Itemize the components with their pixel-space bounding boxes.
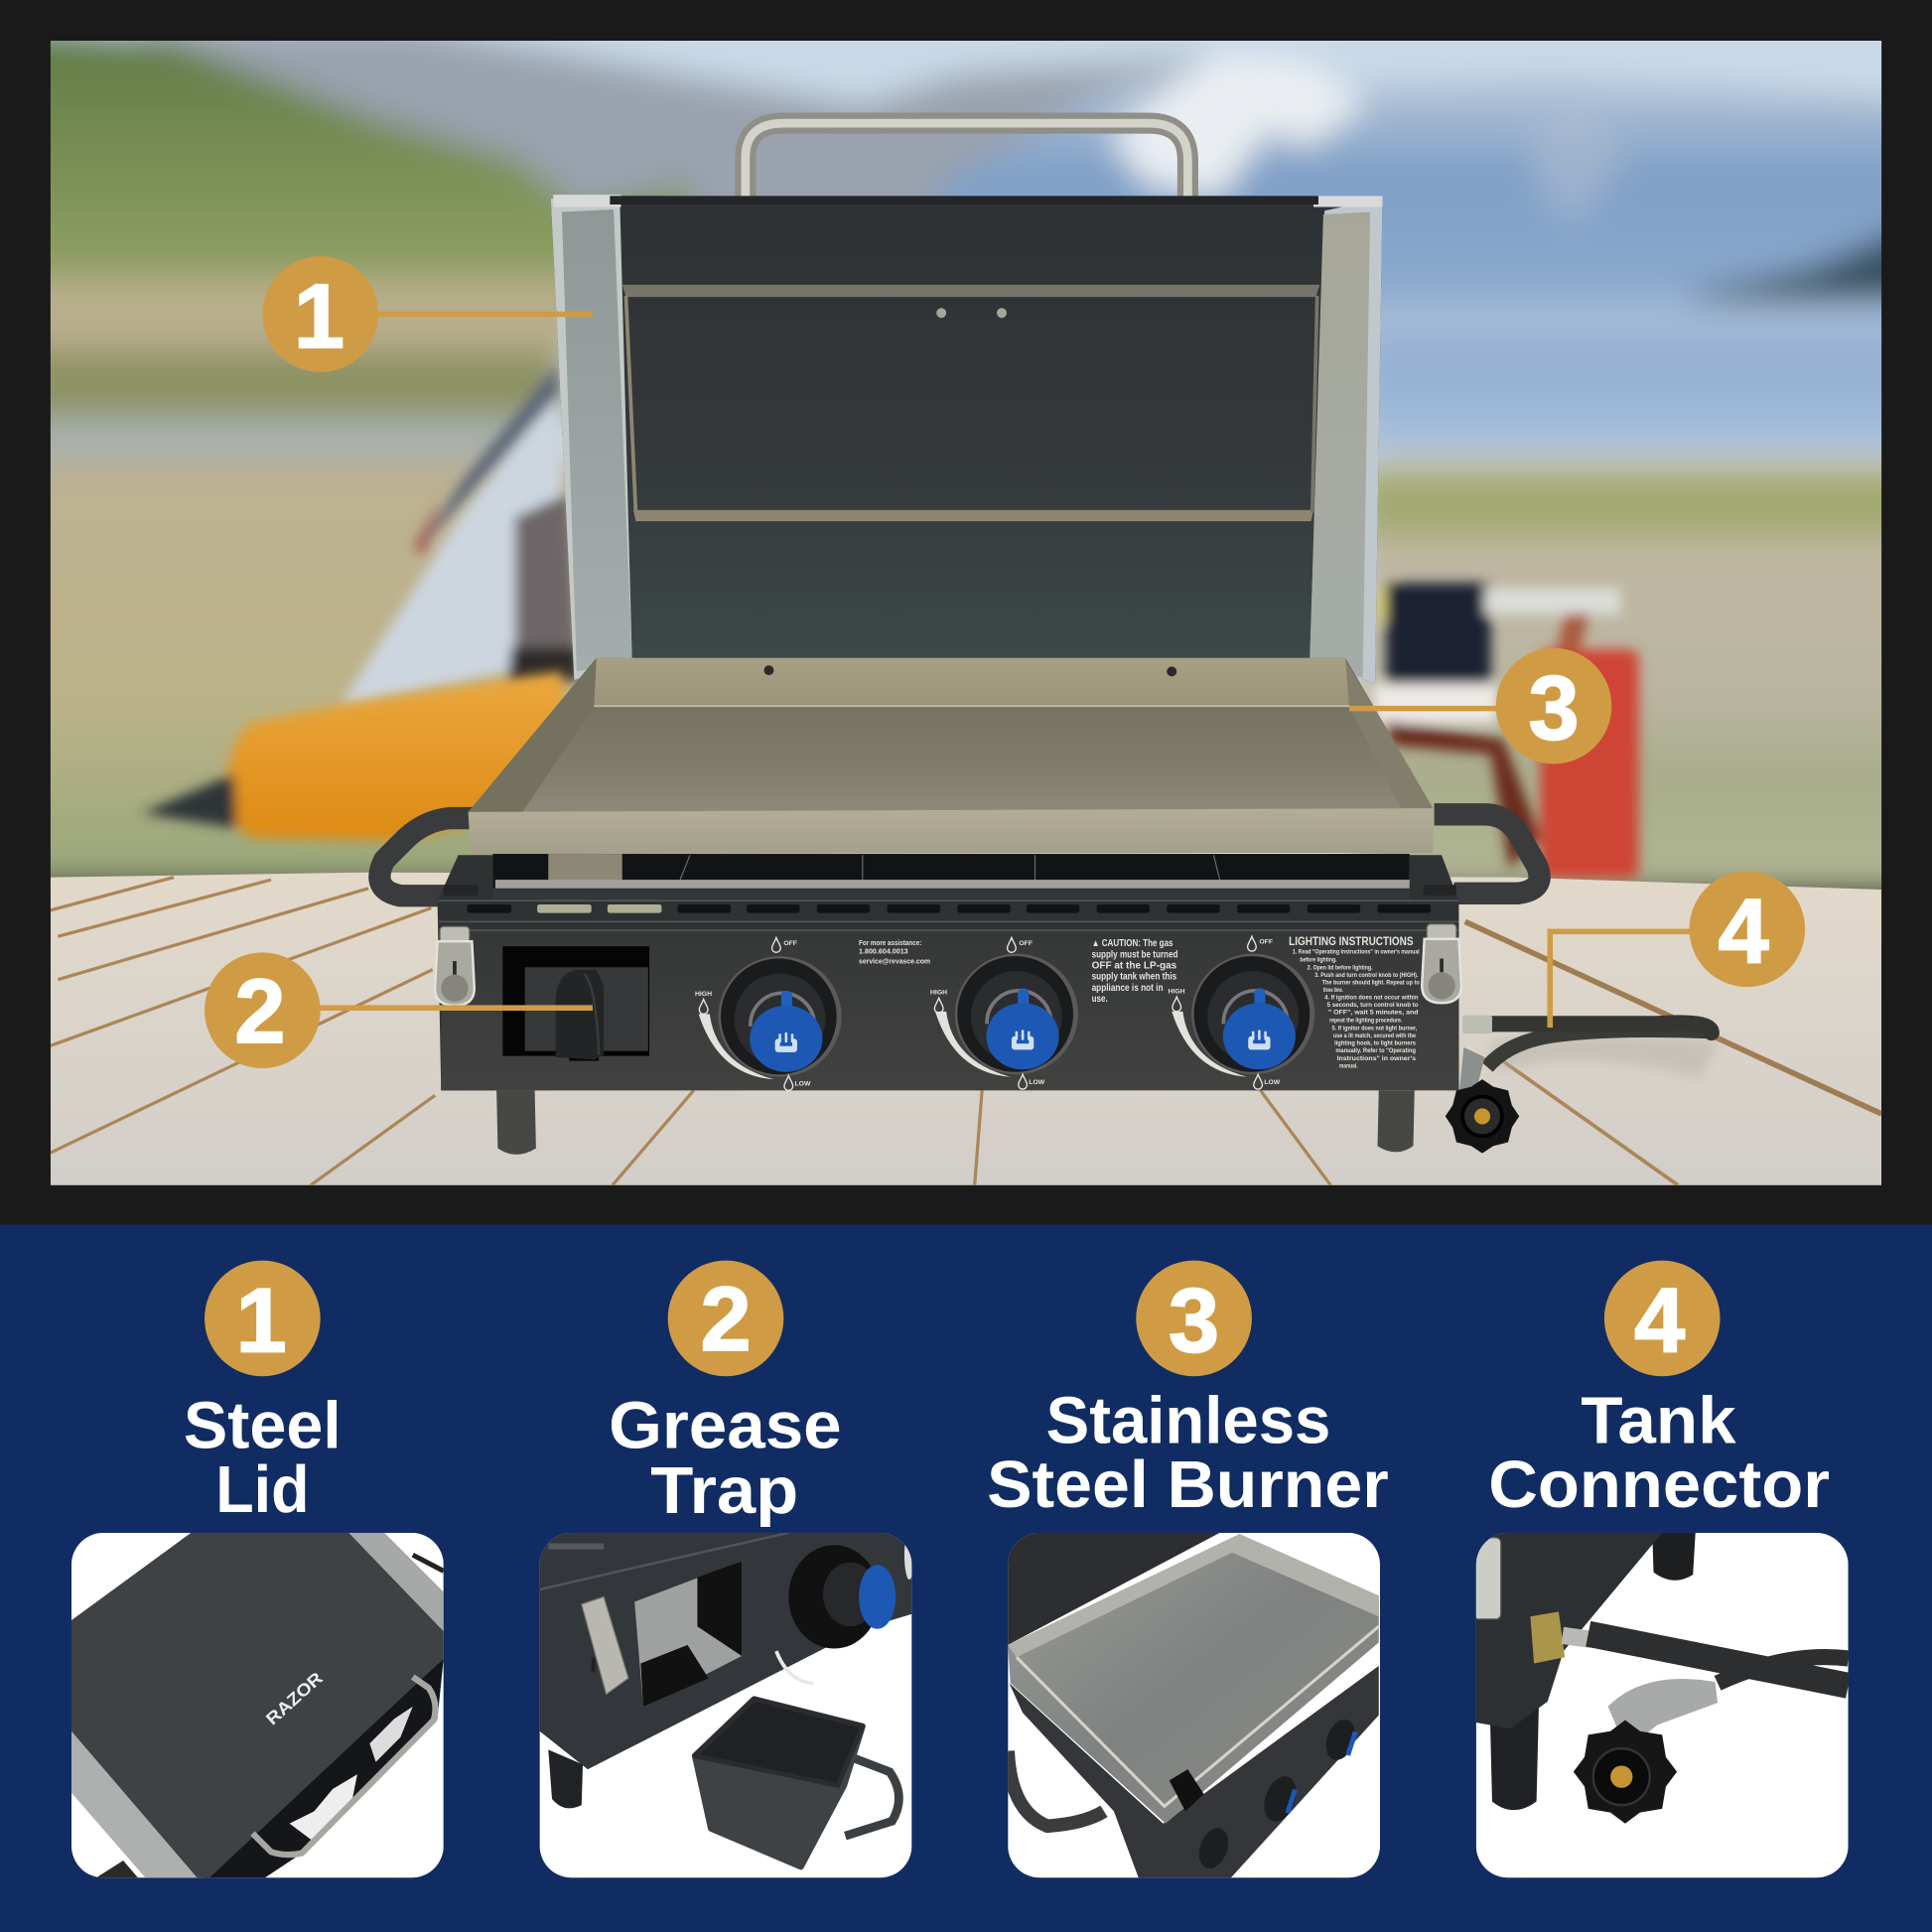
assistance text: For more assistance: [859, 938, 921, 947]
caution text: supply tank when this [1092, 972, 1177, 983]
griddle product [379, 123, 1712, 1155]
feature 3: stainless steel burner [987, 1261, 1389, 1877]
knob labels: LOW [1029, 1079, 1045, 1086]
caution text: appliance is not in [1092, 983, 1164, 994]
caution text [1092, 938, 1177, 1005]
heading: steel lid [184, 1388, 342, 1527]
feature 1: steel lid [71, 1261, 444, 1877]
callout 1 [262, 256, 593, 372]
feature 4: tank connector [1473, 1261, 1849, 1877]
lighting instructions: 3. Push and turn control knob to (HIGH). [1314, 972, 1419, 979]
number badge 1: 1 [236, 1270, 287, 1371]
knob labels [695, 939, 1281, 1087]
lighting instructions: three time. [1323, 987, 1343, 994]
knob labels: OFF [783, 940, 797, 947]
heading: steel lid: Steel [184, 1388, 342, 1462]
knob labels: HIGH [695, 991, 712, 998]
callout 2 [205, 952, 593, 1068]
callout 4: 4 [1719, 881, 1769, 982]
image card: tank hose [1473, 1533, 1849, 1877]
caution text: supply must be turned [1092, 949, 1177, 960]
lighting instructions: The burner should light. Repeat up to [1322, 980, 1420, 987]
griddle tray [469, 658, 1433, 854]
callout 3: 3 [1528, 658, 1580, 759]
lighting instructions: 4. If ignition does not occur within [1324, 995, 1418, 1002]
heading: grease trap [609, 1388, 842, 1528]
side carry handles [379, 814, 1540, 896]
image card: burner plate [1008, 1533, 1380, 1877]
callout 4 [1550, 871, 1805, 1028]
lighting instructions: lighting hook, to light burners [1334, 1039, 1416, 1046]
grease trap opening [502, 946, 649, 1061]
image card: grease cup [540, 1530, 914, 1877]
lighting instructions: use a lit match, secured with the [1333, 1033, 1416, 1039]
caution text: OFF at the LP-gas [1092, 960, 1177, 971]
heading: steel lid: Lid [215, 1452, 310, 1527]
lighting instructions: LIGHTING INSTRUCTIONS [1289, 934, 1414, 948]
knob labels: HIGH [930, 990, 947, 997]
heading: tank connector: Connector [1488, 1448, 1830, 1522]
dark frame background [0, 0, 1932, 1225]
callout 1: 1 [294, 266, 345, 367]
caution text: ▲ CAUTION: The gas [1092, 938, 1173, 949]
knob labels: LOW [1264, 1079, 1281, 1086]
lighting instructions: repeat the lighting procedure. [1329, 1017, 1402, 1024]
heading: tank connector: Tank [1581, 1383, 1736, 1457]
number badge 3: 3 [1169, 1270, 1219, 1371]
open lid [551, 195, 1382, 684]
lighting instructions: before lighting. [1300, 957, 1337, 964]
panel: feature band [0, 1225, 1932, 1932]
lighting instructions: Instructions" in owner's [1337, 1055, 1416, 1062]
image card: closed lid: RAZOR [262, 1668, 327, 1728]
lighting instructions: 5. If ignitor does not light burner, [1332, 1026, 1417, 1033]
latches [435, 926, 475, 1006]
orange inflatable [142, 671, 579, 840]
assistance text [859, 938, 930, 966]
heading: grease trap: Trap [650, 1453, 798, 1528]
assistance text: 1.800.604.0013 [859, 947, 908, 956]
number badge 2: 2 [700, 1269, 752, 1370]
lighting instructions: 1. Read "Operating Instructions" in owner's manual [1293, 949, 1420, 956]
feature 2: grease trap [540, 1261, 914, 1877]
camp chair, table and red tank [1374, 582, 1639, 879]
tent [341, 364, 579, 706]
number badge 4 [1604, 1261, 1721, 1376]
heading: tank connector [1488, 1383, 1830, 1522]
gas hose and regulator [1446, 1016, 1712, 1154]
panel: hero photo [0, 0, 1932, 1185]
lighting instructions: 5 seconds, turn control knob to [1327, 1002, 1418, 1009]
callout 2: 2 [234, 961, 285, 1062]
lighting instructions: " OFF", wait 5 minutes, and [1328, 1009, 1418, 1016]
number badge 4: 4 [1634, 1270, 1685, 1371]
legs [496, 1090, 1415, 1155]
lighting instructions: manually. Refer to "Operating [1335, 1047, 1416, 1054]
knob labels: OFF [1259, 939, 1273, 946]
callout 3 [1349, 648, 1611, 763]
lighting instructions [1289, 934, 1420, 1069]
number badge 1 [205, 1261, 321, 1376]
lid top handle [746, 123, 1187, 198]
wooden deck table [50, 873, 1881, 1185]
heading: stainless steel burner [987, 1383, 1389, 1522]
heading: stainless steel burner: Stainless [1046, 1383, 1330, 1457]
number badge 2 [668, 1261, 783, 1376]
image card: closed lid [71, 1533, 444, 1877]
burner knobs [699, 936, 1314, 1090]
knob labels: OFF [1019, 940, 1033, 947]
lighting instructions: 2. Open lid before lighting. [1308, 965, 1373, 972]
heading: stainless steel burner: Steel Burner [987, 1448, 1389, 1522]
blurred outdoor scenery [0, 0, 1932, 895]
heading: grease trap: Grease [609, 1388, 842, 1462]
knob labels: LOW [794, 1080, 811, 1087]
assistance text: service@revasce.com [859, 957, 930, 966]
caution text: use. [1092, 994, 1108, 1005]
number badge 3 [1136, 1261, 1252, 1376]
control panel body [438, 854, 1458, 1090]
knob labels: HIGH [1169, 988, 1185, 995]
lighting instructions: manual. [1339, 1062, 1358, 1069]
